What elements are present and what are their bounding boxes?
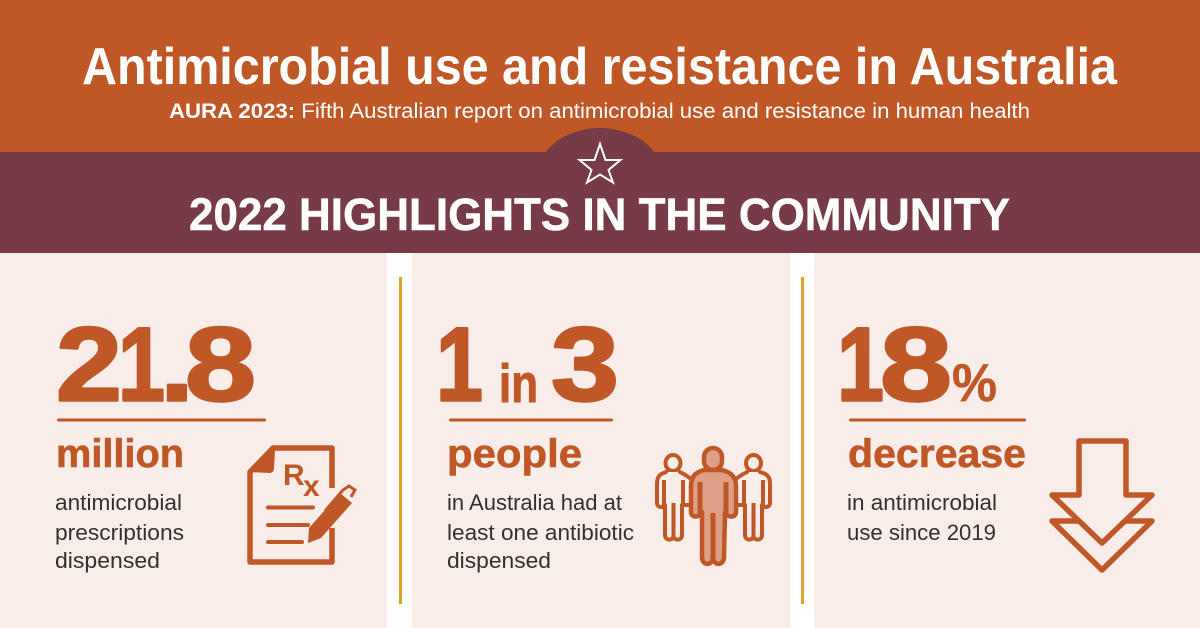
section heading: 2022 HIGHLIGHTS IN THE COMMUNITY xyxy=(189,189,1010,240)
icon: star xyxy=(580,144,620,182)
description: dispensed xyxy=(55,548,160,573)
right person xyxy=(735,455,770,540)
icon: prescription and pen xyxy=(248,447,355,562)
divider xyxy=(801,277,804,604)
description xyxy=(847,490,997,545)
statistic: 1 in 3: 1 xyxy=(436,306,483,424)
icon: three people xyxy=(657,448,770,564)
icon: prescription and pen: R xyxy=(283,459,305,492)
band tab xyxy=(545,128,655,153)
statistic: 21.8: 1 xyxy=(118,306,165,424)
description: in antimicrobial xyxy=(847,490,997,515)
description: in Australia had at xyxy=(447,490,622,515)
statistic: 18% xyxy=(837,306,997,424)
description xyxy=(447,490,634,573)
panel: prescriptions xyxy=(0,253,387,628)
statistic: 21.8: 8 xyxy=(185,306,256,424)
description: antimicrobial xyxy=(55,490,182,515)
title: Antimicrobial use and resistance in Australia xyxy=(82,38,1118,96)
statistic: 21.8 xyxy=(56,306,256,424)
statistic: 18%: 8 xyxy=(880,306,952,424)
header band xyxy=(0,0,1200,152)
centre person xyxy=(691,448,736,564)
statistic: 18%: % xyxy=(952,354,997,413)
rule xyxy=(849,418,1026,422)
unit: decrease: decrease xyxy=(848,432,1026,476)
icon: down arrow xyxy=(1052,441,1152,570)
description: dispensed xyxy=(447,548,551,573)
left person xyxy=(657,455,692,540)
description xyxy=(55,490,184,573)
statistic: 1 in 3 xyxy=(436,306,619,424)
statistic: 18%: 1 xyxy=(837,306,884,424)
unit: million: million xyxy=(56,432,184,476)
icon: prescription and pen: x xyxy=(303,470,320,503)
panel: people xyxy=(412,253,790,628)
panel: decrease xyxy=(814,253,1200,628)
description: prescriptions xyxy=(55,520,184,545)
statistic: 1 in 3: in xyxy=(499,354,538,414)
description: least one antibiotic xyxy=(447,520,634,545)
subtitle: AURA 2023: Fifth Australian report on antimicrobial use and resistance in human health xyxy=(169,100,1030,123)
highlights band xyxy=(0,128,1200,253)
statistic: 21.8: . xyxy=(160,306,194,424)
divider xyxy=(399,277,402,604)
description: use since 2019 xyxy=(847,520,996,545)
rule xyxy=(449,418,613,422)
rule xyxy=(57,418,266,422)
statistic: 21.8: 2 xyxy=(56,306,122,424)
statistic: 1 in 3: 3 xyxy=(551,306,619,424)
unit: people: people xyxy=(447,432,582,476)
